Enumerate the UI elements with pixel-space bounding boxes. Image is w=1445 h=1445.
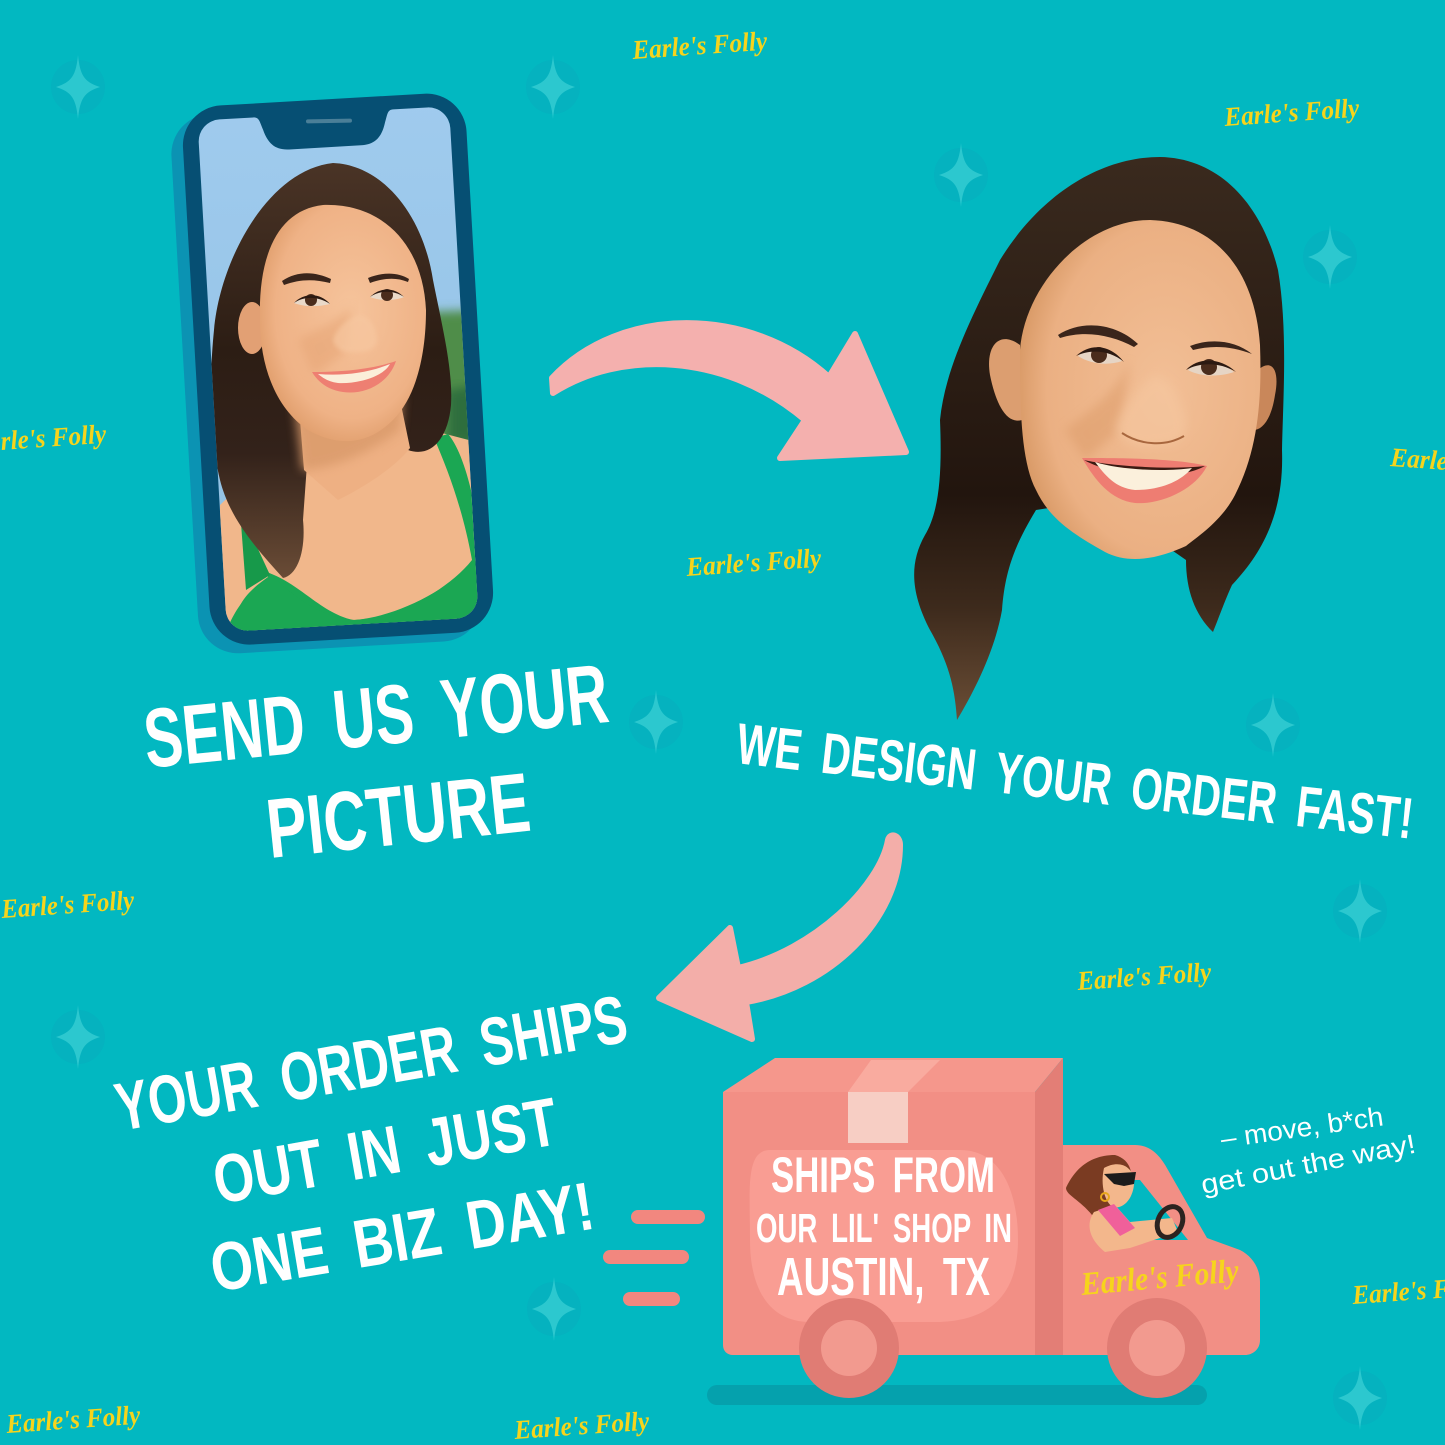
cheek shadow — [302, 311, 351, 370]
brows — [282, 273, 331, 285]
trees — [438, 303, 469, 450]
ears — [989, 339, 1022, 421]
text blob — [750, 1150, 1018, 1322]
eyes — [1078, 349, 1122, 364]
heading: your order ships: YOUR ORDER SHIPS — [109, 981, 633, 1146]
driver — [1066, 1155, 1188, 1252]
hair — [914, 157, 1284, 720]
wheels — [799, 1298, 899, 1398]
tape top — [848, 1060, 940, 1092]
cut-out head — [914, 157, 1284, 720]
heading: send us your picture — [139, 646, 612, 876]
box top — [723, 1058, 1063, 1092]
brand watermarks: Earle's Folly — [4, 1400, 142, 1439]
heading: your order ships: ONE BIZ DAY! — [205, 1168, 599, 1307]
brand watermarks: Earle's Folly — [0, 885, 136, 924]
face — [260, 205, 426, 441]
speed lines — [603, 1210, 705, 1306]
driver speech: get out the way! — [1198, 1129, 1418, 1200]
cab — [1063, 1145, 1260, 1355]
phone shadow body — [169, 100, 484, 656]
heading: send us your picture: SEND US YOUR — [139, 646, 612, 786]
window — [1116, 1180, 1188, 1240]
brand watermarks: Earle's Folly — [512, 1406, 651, 1445]
brand watermarks: Earle's Folly — [1222, 93, 1361, 132]
driver speech: – move, b*ch — [1219, 1101, 1385, 1154]
ground shadow — [707, 1385, 1207, 1405]
nostril line — [1122, 433, 1184, 443]
box front — [723, 1092, 1035, 1355]
eyes — [294, 298, 330, 306]
heading: send us your picture: PICTURE — [262, 755, 534, 876]
arrow: photo to design — [552, 323, 906, 458]
nose — [333, 321, 374, 351]
brand watermarks: Earle's Folly — [684, 543, 823, 582]
neck shadow — [294, 395, 403, 470]
phone with photo — [169, 90, 498, 656]
arrow: design to shipping — [659, 835, 900, 1039]
lips — [1082, 458, 1207, 503]
tape front — [848, 1092, 908, 1143]
heading: your order ships — [109, 981, 633, 1307]
photo on screen — [198, 107, 478, 631]
hair — [211, 163, 451, 578]
brows — [1058, 325, 1138, 347]
delivery truck: AUSTIN, TX — [777, 1247, 990, 1307]
dress — [230, 434, 488, 640]
teeth — [1095, 462, 1192, 490]
face — [1020, 220, 1260, 559]
brand watermarks: Earle's Folly — [1075, 957, 1213, 996]
neck — [300, 409, 410, 498]
chest and shoulders — [220, 434, 478, 631]
ear — [238, 302, 262, 354]
phone speaker — [306, 119, 352, 123]
heading: your order ships: OUT IN JUST — [207, 1083, 563, 1219]
box side — [1035, 1058, 1063, 1355]
driver speech — [1198, 1101, 1418, 1200]
left strap — [241, 526, 270, 590]
brand watermarks: Earle's Folly — [630, 26, 769, 65]
cheek shade — [1065, 360, 1130, 460]
truck text: SHIPS FROM — [771, 1147, 995, 1203]
delivery truck — [723, 1058, 1260, 1398]
phone frame — [181, 91, 495, 647]
nose — [1115, 375, 1186, 446]
truck logo: Earle's Folly — [1079, 1253, 1240, 1303]
mouth dark — [1084, 460, 1205, 476]
delivery truck: OUR LIL' SHOP IN — [756, 1205, 1012, 1251]
mouth — [312, 361, 396, 393]
